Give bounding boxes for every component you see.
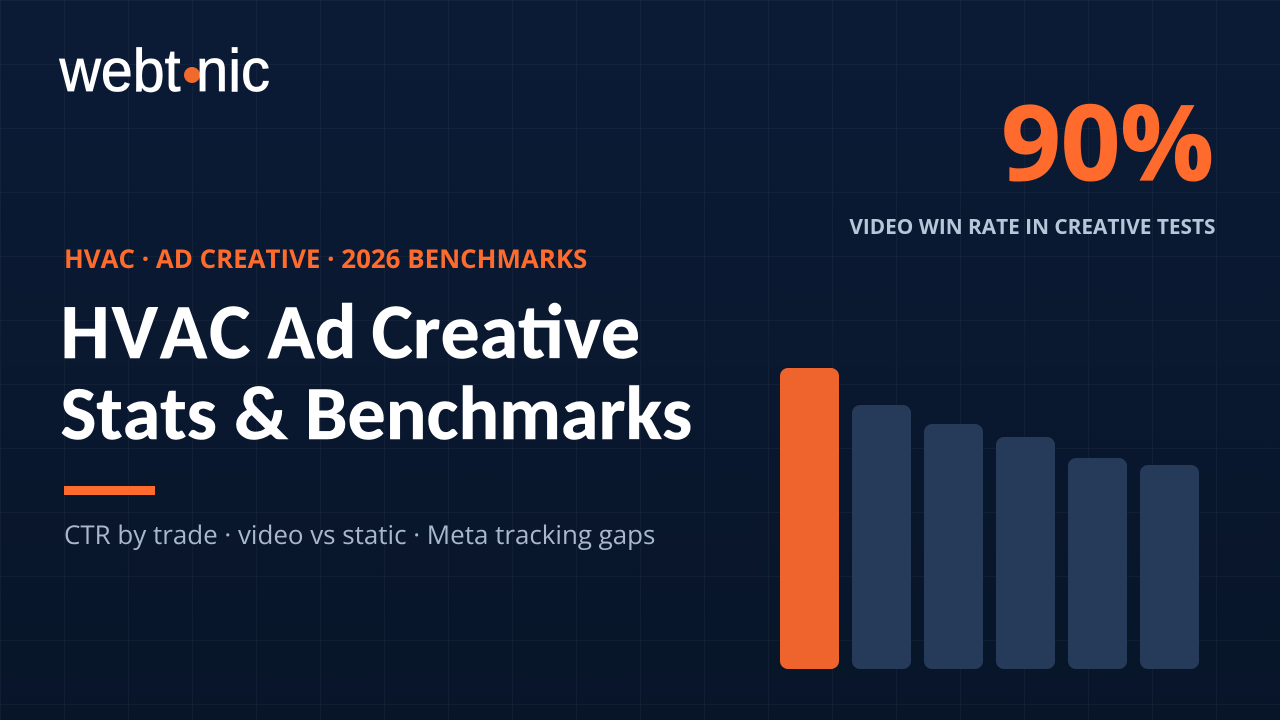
title line 1: HVAC — [60, 284, 252, 379]
logo: webtonic — [58, 41, 270, 101]
title line 1 — [60, 284, 640, 379]
big stat: 90%: 90% — [1001, 70, 1214, 211]
bar 2 — [852, 405, 911, 669]
stat label: VIDEO WIN RATE IN CREATIVE TESTS — [849, 213, 1216, 241]
bar 6 — [1140, 465, 1199, 669]
bar 4 — [996, 437, 1055, 669]
eyebrow: HVAC · AD CREATIVE · 2026 BENCHMARKS — [64, 240, 587, 276]
title — [60, 284, 692, 460]
bar chart — [780, 368, 1199, 669]
subtitle: CTR by trade · video vs static · Meta tracking gaps — [64, 516, 655, 552]
bar 5 — [1068, 458, 1127, 669]
bar 3 — [924, 424, 983, 669]
bar 1: highlighted — [780, 368, 839, 669]
accent rule — [64, 486, 155, 495]
title line 1: Creative — [372, 284, 640, 379]
title line 2: Stats & Benchmarks — [60, 368, 692, 460]
title line 1: Ad — [268, 284, 357, 379]
